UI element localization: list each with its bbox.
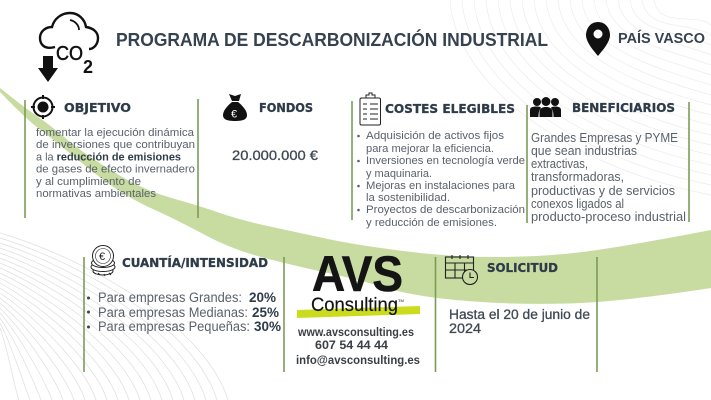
list: costes: la sostenibilidad. [366, 192, 450, 204]
amount: 20.000.000 € [232, 148, 319, 163]
list: cuantia: Para empresas Medianas: [98, 305, 248, 320]
panel: objetivo [25, 95, 198, 218]
panel: fondos [223, 94, 352, 220]
contact details: www.avsconsulting.es [297, 327, 414, 339]
title: PROGRAMA DE DESCARBONIZACIÓN INDUSTRIAL [116, 29, 548, 50]
deadline text: 2024 [449, 321, 482, 336]
text: beneficiarios: Grandes Empresas y PYME [531, 131, 678, 145]
text: beneficiarios: transformadoras, [531, 170, 624, 184]
panel: costes elegibles [357, 93, 525, 229]
contact details: 607 54 44 44 [315, 340, 389, 352]
list: cuantia: Para empresas Pequeñas: [98, 319, 250, 334]
text: objetivo [36, 127, 195, 200]
deadline text: Hasta el 20 de junio de [449, 307, 590, 322]
panel: solicitud [436, 255, 597, 372]
icon: coins: € [99, 251, 105, 263]
deadline text [449, 307, 590, 336]
panel: cuantia [84, 246, 284, 372]
list: cuantia [87, 290, 281, 334]
icon: coins [91, 246, 115, 276]
icon: group of people [530, 97, 561, 117]
icon: money bag: € [231, 108, 237, 120]
icon: calendar with clock [446, 255, 478, 284]
region label: PAÍS VASCO [618, 30, 705, 47]
text: beneficiarios: extractivas, [531, 157, 588, 171]
list: costes: y reducción de emisiones. [366, 217, 497, 229]
list: costes: para mejorar la eficiencia. [366, 143, 494, 155]
text: beneficiarios: que sean industrias [531, 144, 637, 158]
list: cuantia: 25% [252, 305, 279, 320]
list: cuantia: 30% [254, 319, 281, 334]
text: beneficiarios: conexos ligados al [531, 197, 624, 211]
icon: CO2 cloud with down arrow [38, 13, 98, 82]
list: costes: Adquisición de activos fijos [366, 130, 505, 142]
heading: objetivo: OBJETIVO [64, 101, 131, 115]
heading: beneficiarios: BENEFICIARIOS [572, 101, 675, 115]
list: cuantia: Para empresas Grandes: [98, 290, 242, 305]
heading: fondos: FONDOS [259, 101, 313, 115]
text: beneficiarios: producto-proceso industrial [531, 210, 686, 224]
text: objetivo: de inversiones que contribuyan [36, 139, 195, 151]
list: cuantia: 20% [249, 290, 276, 305]
green swoosh [0, 88, 711, 304]
text: beneficiarios: productivas y de servicios [531, 184, 675, 198]
contact details [296, 327, 420, 367]
text: beneficiarios [531, 131, 686, 224]
list: costes: Inversiones en tecnología verde [366, 155, 525, 167]
heading: cuantia: CUANTÍA/INTENSIDAD [122, 255, 268, 270]
list: costes [357, 130, 525, 229]
icon: target [31, 95, 55, 119]
logo: AVS Consulting [297, 246, 420, 318]
list: costes: Proyectos de descarbonización [366, 204, 525, 216]
icon: CO2 cloud with down arrow: 2 [83, 57, 93, 77]
heading: costes elegibles: COSTES ELEGIBLES [385, 102, 515, 116]
list: costes: Mejoras en instalaciones para [366, 180, 516, 192]
logo: AVS Consulting: TM [398, 298, 404, 303]
text: objetivo: de gases de efecto invernadero [36, 164, 195, 176]
panel: beneficiarios [527, 97, 689, 224]
text: objetivo: a la reducción de emisiones [36, 152, 181, 164]
icon: checklist [360, 93, 380, 125]
text: objetivo: y al cumplimiento de [36, 176, 141, 188]
icon: CO2 cloud with down arrow: CO [56, 43, 83, 65]
icon: location pin [586, 22, 610, 56]
text: objetivo: normativas ambientales [36, 188, 157, 200]
heading: solicitud: SOLICITUD [487, 261, 558, 275]
logo: AVS Consulting: AVS [312, 246, 403, 302]
contact details: info@avsconsulting.es [296, 355, 420, 367]
list: costes: y maquinaria. [366, 168, 432, 180]
text: objetivo: fomentar la ejecución dinámica [36, 127, 195, 139]
logo: AVS Consulting: Consulting [311, 295, 398, 316]
